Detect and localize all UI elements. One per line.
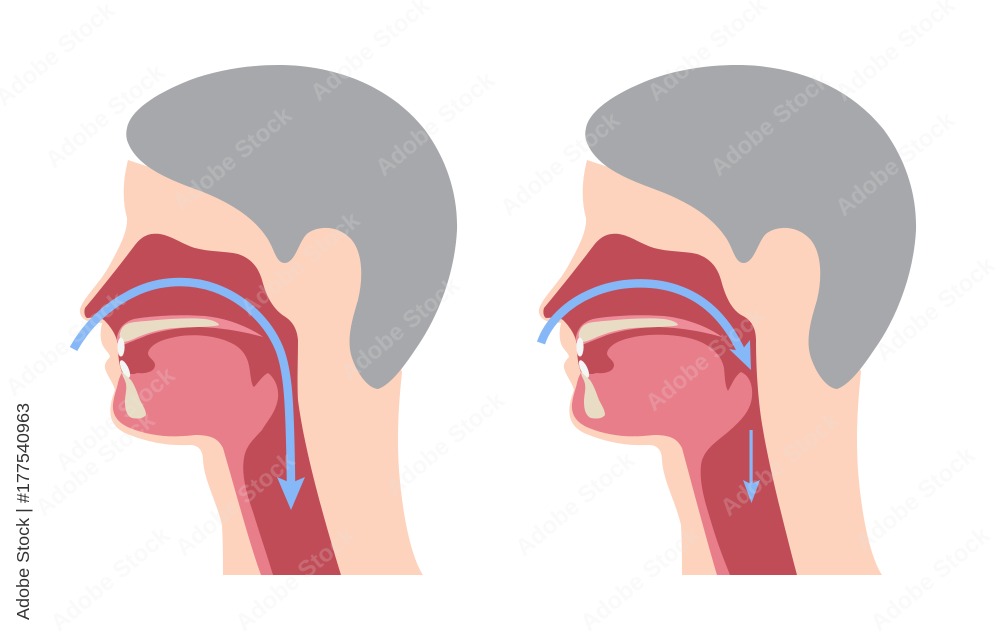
reduced airflow arrow: [743, 430, 760, 503]
nasal cavity and throat: [543, 234, 797, 575]
hard palate: [576, 315, 722, 345]
stock watermark: Adobe Stock: [850, 441, 981, 557]
stock watermark: Adobe Stock: [640, 301, 771, 417]
skin: head and neck: [539, 160, 882, 575]
stock watermark: Adobe Stock: [575, 521, 706, 636]
figure: obstructed airway, right head: [539, 65, 916, 575]
stock watermark: Adobe Stock: [45, 521, 176, 636]
stock watermark: Adobe Stock: [40, 58, 171, 174]
stock watermark: Adobe Stock: [370, 66, 501, 182]
hard palate: [117, 315, 263, 345]
side credit label: Adobe Stock | #177540963: [13, 403, 33, 620]
upper tooth: [117, 338, 125, 356]
stock watermark: Adobe Stock: [30, 406, 161, 522]
airflow arrow passing through: [74, 282, 305, 510]
stock watermark: Adobe Stock: [830, 106, 961, 222]
hair: [126, 65, 457, 389]
skin: head and neck: [80, 160, 423, 575]
stock watermark: Adobe Stock: [50, 361, 181, 477]
stock watermark: Adobe Stock: [865, 521, 996, 636]
figure: open airway, left head: [74, 65, 457, 575]
stock watermark: Adobe Stock: [510, 446, 641, 562]
lower jaw bone: [122, 372, 146, 419]
stock watermark: Adobe Stock: [235, 206, 366, 322]
stock watermark: Adobe Stock: [495, 106, 626, 222]
enlarged tongue and pharynx: [572, 335, 752, 575]
tongue and pharynx: [113, 335, 278, 575]
stock watermark: Adobe Stock: [230, 521, 361, 636]
stock watermark: Adobe Stock: [0, 286, 131, 402]
stock watermark: Adobe Stock: [705, 66, 836, 182]
stock watermark: Adobe Stock: [870, 251, 1000, 367]
stock watermark: Adobe Stock: [167, 101, 298, 217]
stock watermark: Adobe Stock: [170, 446, 301, 562]
lower tooth: [577, 359, 591, 379]
lower jaw bone: [581, 372, 605, 419]
upper jaw bone: [120, 318, 219, 342]
upper tooth: [576, 338, 584, 356]
stock watermark: Adobe Stock: [715, 406, 846, 522]
lower tooth: [118, 359, 132, 379]
airflow arrow blocked at throat: [541, 283, 751, 370]
upper jaw bone: [579, 318, 678, 342]
nasal cavity and throat: [84, 234, 341, 575]
stock watermark: Adobe Stock: [335, 271, 466, 387]
hair: [585, 65, 916, 389]
stock watermark: Adobe Stock: [380, 386, 511, 502]
